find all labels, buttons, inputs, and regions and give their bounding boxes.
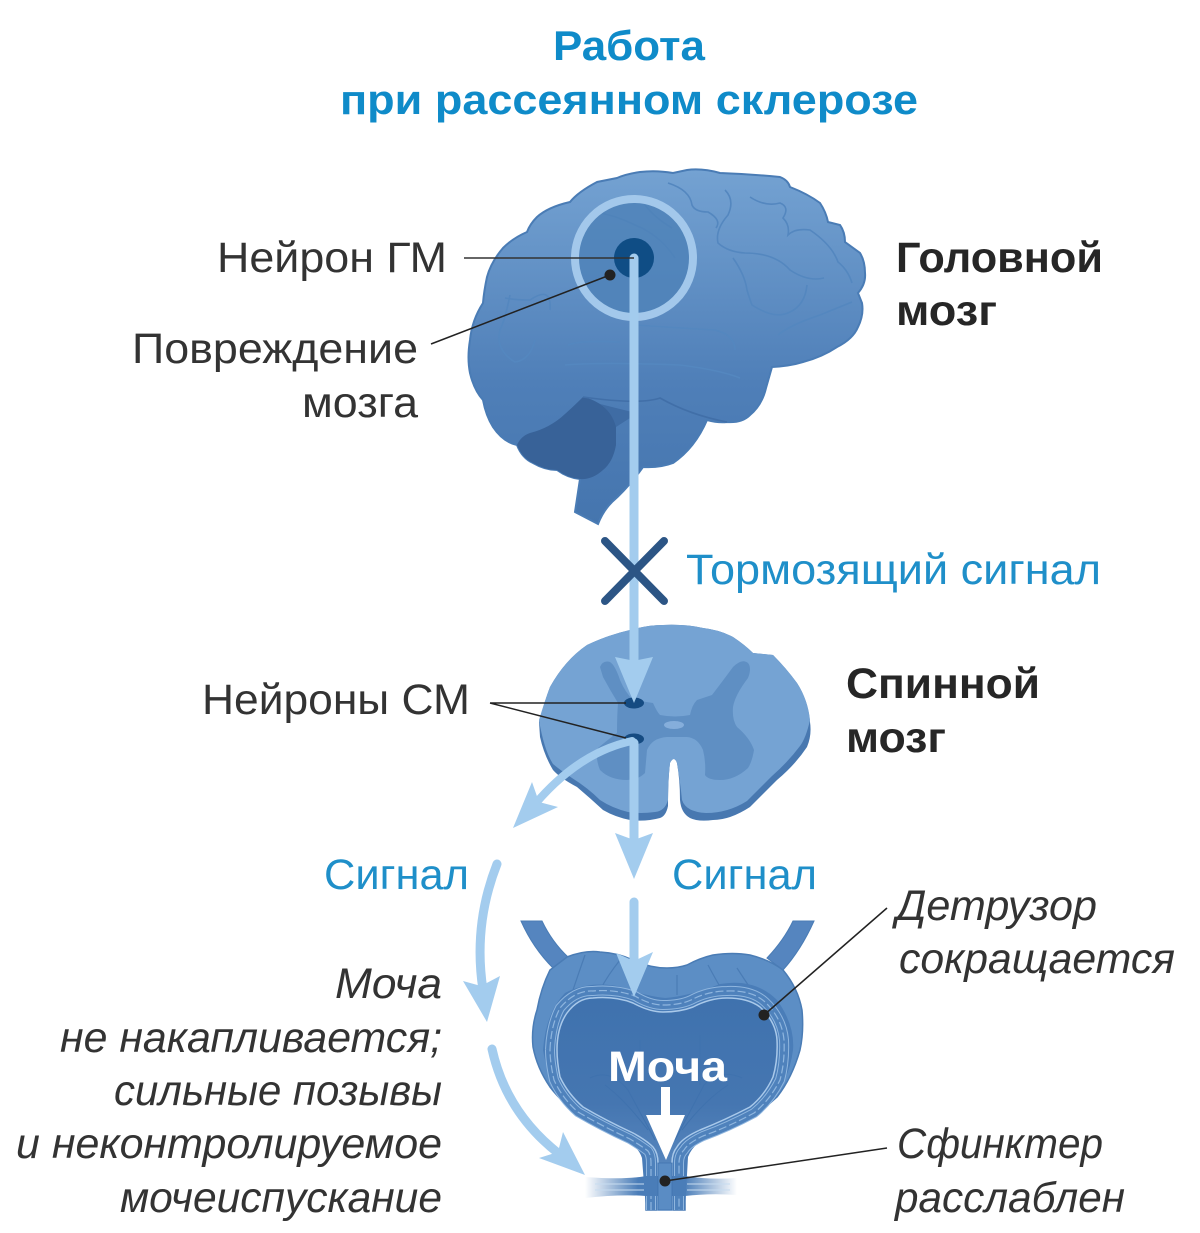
brain illustration — [468, 169, 865, 524]
label: inhibitory signal: Тормозящий сигнал — [686, 546, 1101, 594]
heading: spinal cord: Спинной — [846, 660, 1040, 708]
text block: symptoms: сильные позывы — [114, 1067, 442, 1115]
arrow: curved signal to sphincter — [492, 1049, 585, 1175]
heading: brain: мозг — [896, 287, 997, 335]
upper spinal neuron — [624, 698, 644, 708]
lower spinal neuron — [624, 734, 644, 744]
text block: symptoms: мочеиспускание — [120, 1174, 442, 1222]
label: brain damage — [132, 325, 418, 427]
heading: spinal cord — [846, 660, 1040, 762]
label: brain neuron: Нейрон ГМ — [217, 234, 447, 282]
bladder outer wall — [532, 952, 803, 1210]
label: right signal: Сигнал — [672, 851, 817, 899]
label: brain damage: Повреждение — [132, 325, 418, 373]
label: sphincter: Сфинктер — [897, 1120, 1103, 1168]
cord white matter — [539, 625, 810, 813]
crossed signal mark — [605, 541, 664, 601]
urethra channel — [658, 1163, 672, 1210]
brain folds — [499, 183, 852, 422]
bladder illustration — [521, 921, 814, 1210]
brain stem shadow — [600, 404, 632, 427]
arrow: signal into bladder — [616, 902, 653, 997]
title: Работа — [553, 22, 706, 69]
bladder folds — [573, 955, 755, 995]
cord underside — [539, 625, 811, 821]
damage zone ring — [575, 199, 693, 317]
title — [340, 22, 918, 123]
label: urine in bladder: Моча — [608, 1043, 728, 1091]
lumen creases — [590, 1035, 742, 1140]
text block: symptoms: Моча — [335, 960, 442, 1008]
arrow: spinal cord straight down — [615, 743, 653, 879]
label: brain damage: мозга — [302, 379, 418, 427]
title: при рассеянном склерозе — [340, 76, 918, 123]
bladder muscle wall — [543, 983, 793, 1210]
heading: brain — [896, 234, 1103, 335]
spinal cord illustration — [539, 625, 811, 821]
bladder lumen — [557, 998, 777, 1210]
arrow: curved signal to urine label — [463, 864, 500, 1022]
leader lines and dots — [431, 258, 887, 1186]
heading: brain: Головной — [896, 234, 1103, 282]
arrow: spinal cord curving left — [513, 741, 632, 828]
text block: symptoms: и неконтролируемое — [16, 1120, 442, 1168]
label: detrusor — [892, 882, 1175, 983]
muscle cell pattern — [550, 991, 784, 1210]
label: detrusor: Детрузор — [892, 882, 1097, 930]
text block: symptoms — [16, 960, 442, 1222]
brain neuron — [614, 238, 654, 278]
right ureter — [767, 921, 814, 970]
label: left signal: Сигнал — [324, 851, 469, 899]
central canal — [664, 721, 684, 729]
heading: spinal cord: мозг — [846, 714, 946, 762]
left ureter — [521, 921, 568, 968]
descending inhibitory signal arrow — [615, 258, 653, 703]
cord grey matter — [597, 661, 754, 780]
brain outline — [468, 169, 865, 524]
label: sphincter: расслаблен — [893, 1174, 1125, 1222]
white urine flow arrow — [646, 1087, 685, 1160]
label: detrusor: сокращается — [899, 935, 1175, 983]
cerebellum — [517, 397, 616, 479]
label: spinal neurons: Нейроны СМ — [202, 676, 470, 724]
sphincter muscle fibres — [585, 1176, 737, 1198]
text block: symptoms: не накапливается; — [60, 1014, 442, 1062]
label: sphincter — [893, 1120, 1125, 1222]
